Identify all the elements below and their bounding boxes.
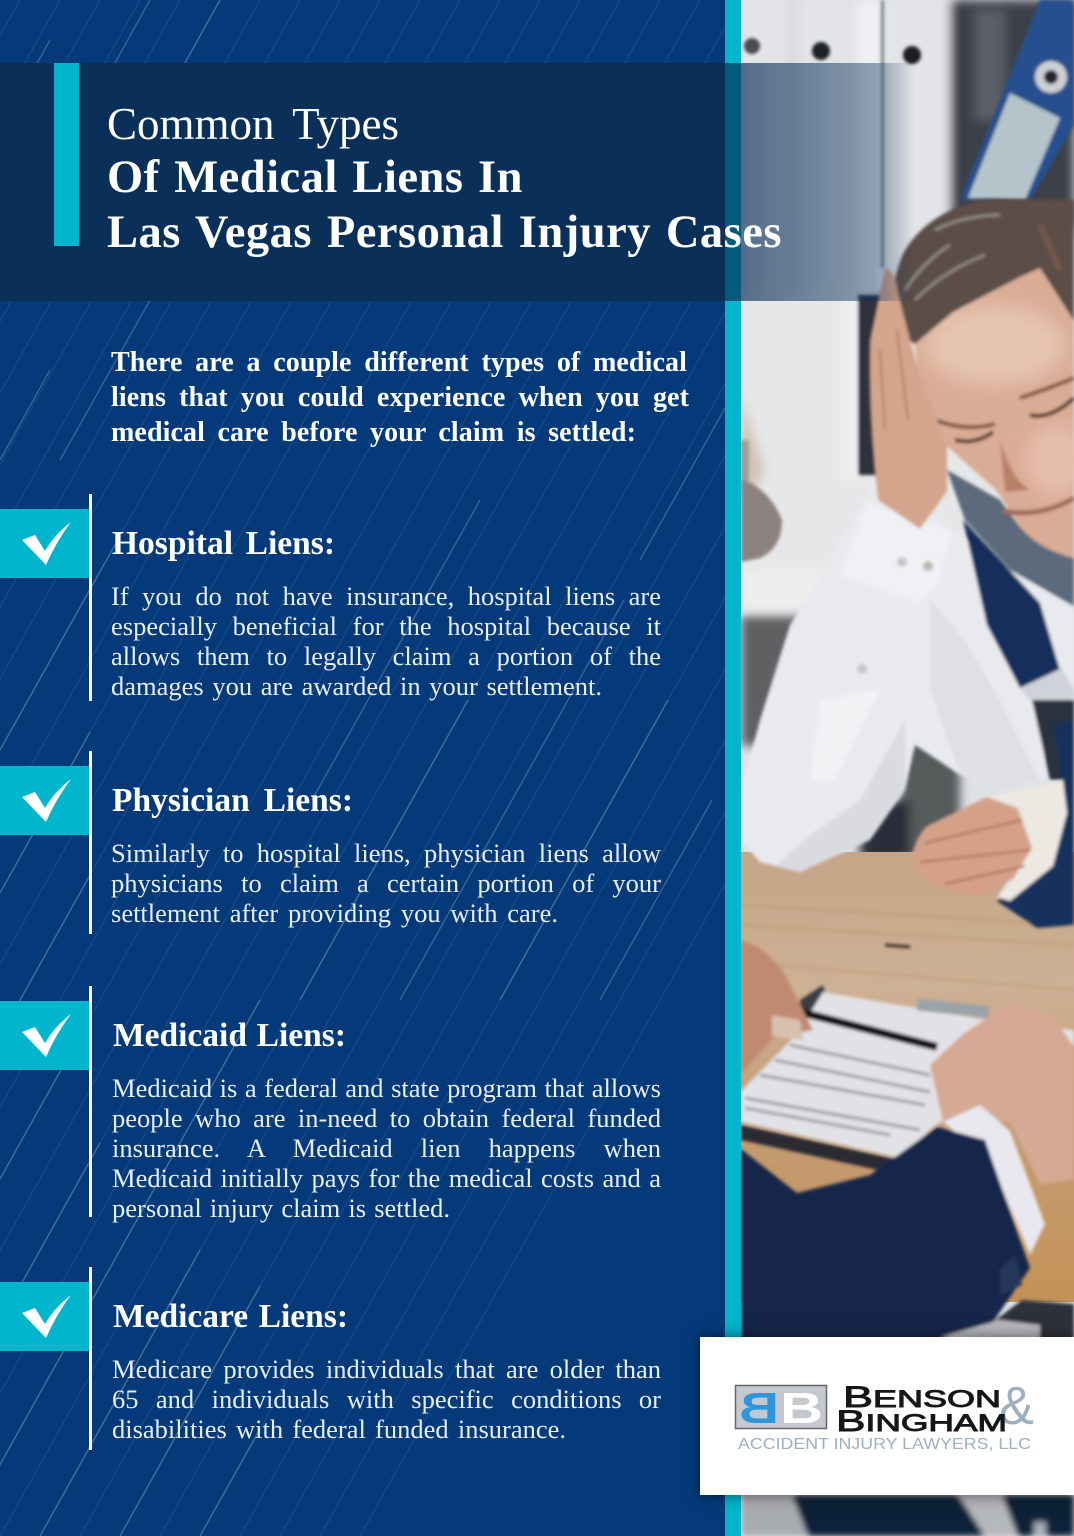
title: Common Types — [107, 99, 399, 149]
text: hospital liens body: If you do not have insurance, hospital liens are — [111, 581, 661, 611]
heading: medicaid liens: Medicaid Liens: — [113, 1017, 346, 1054]
logo: Benson & Bingham: & — [999, 1376, 1034, 1436]
text: medicare liens body: Medicare provides individuals that are older than — [112, 1354, 661, 1384]
intro text: medical care before your claim is settled: — [111, 417, 636, 448]
logo: Benson & Bingham — [734, 1376, 1034, 1453]
panel: physician liens — [0, 751, 661, 934]
logo: Benson & Bingham: B — [780, 1384, 823, 1433]
hand on table — [912, 797, 1032, 897]
title accent bar — [54, 63, 79, 246]
intro text: There are a couple different types of medical — [111, 347, 687, 378]
scarf / neck brace — [947, 470, 1074, 606]
background with diagonal stripes — [0, 0, 725, 1536]
table edge — [993, 1300, 1074, 1340]
panel: medicaid liens — [0, 986, 661, 1223]
text: medicare liens body — [112, 1354, 661, 1444]
text: medicaid liens body — [112, 1073, 661, 1223]
text: medicaid liens body: people who are in-need to obtain federal funded — [112, 1103, 661, 1133]
text: hospital liens body — [111, 581, 661, 701]
text: physician liens body: Similarly to hospital liens, physician liens allow — [111, 838, 661, 868]
lawyer right hand — [930, 1003, 1074, 1184]
navy suit — [741, 1127, 1030, 1348]
text: hospital liens body: damages you are awarded in your settlement. — [111, 671, 602, 701]
text: physician liens body: physicians to claim a certain portion of your — [111, 868, 661, 898]
logo: Benson & Bingham: ACCIDENT INJURY LAWYERS, LLC — [738, 1436, 1031, 1453]
face — [915, 268, 1074, 558]
pen — [800, 1012, 937, 1047]
intro text: liens that you could experience when you get — [111, 382, 689, 413]
text: physician liens body: settlement after providing you with care. — [111, 898, 558, 928]
panel: medicare liens — [0, 1267, 661, 1450]
brows eyes mouth — [935, 420, 995, 427]
shirt — [741, 470, 1074, 872]
clipboard — [800, 985, 830, 1025]
lawyer left hand — [741, 941, 813, 1074]
text: medicaid liens body: Medicaid initially pays for the medical costs and a — [112, 1163, 661, 1193]
logo: Benson & Bingham: B INGHAM — [836, 1405, 1007, 1438]
icon: check box — [0, 766, 89, 835]
teal vertical stripe — [725, 0, 741, 1536]
heading: hospital liens: Hospital Liens: — [112, 525, 335, 562]
hair — [888, 199, 1074, 344]
title: Las Vegas Personal Injury Cases — [107, 206, 782, 258]
text: medicare liens body: 65 and individuals with specific conditions or — [112, 1384, 661, 1414]
white cuff — [943, 1105, 1045, 1255]
title — [107, 99, 782, 258]
logo: Benson & Bingham: B — [739, 1384, 779, 1433]
logo: Benson & Bingham: B ENSON — [843, 1381, 1001, 1414]
cast — [987, 780, 1067, 901]
title: Of Medical Liens In — [107, 152, 523, 202]
raised hand — [870, 268, 947, 529]
text: hospital liens body: allows them to legally claim a portion of the — [111, 641, 661, 671]
text: medicaid liens body: insurance. A Medicaid lien happens when — [112, 1133, 661, 1163]
heading: physician liens: Physician Liens: — [112, 782, 353, 819]
icon: check box — [0, 1282, 89, 1351]
text: medicaid liens body: Medicaid is a federal and state program that allows — [112, 1073, 661, 1103]
heading: medicare liens: Medicare Liens: — [113, 1298, 348, 1335]
photo: stressed man with neck brace and lawyer at desk — [741, 0, 1074, 1536]
text: physician liens body — [111, 838, 661, 928]
title band — [0, 63, 910, 301]
icon: check box — [0, 509, 89, 578]
text: medicaid liens body: personal injury claim is settled. — [112, 1193, 450, 1223]
logo panel — [700, 1337, 1074, 1495]
text: medicare liens body: disabilities with federal funded insurance. — [112, 1414, 566, 1444]
text: hospital liens body: especially beneficial for the hospital because it — [111, 611, 661, 641]
lower strip under logo — [741, 1490, 1074, 1536]
sleeve with navy — [997, 720, 1074, 928]
table — [741, 852, 1074, 1302]
icon: check box — [0, 1001, 89, 1070]
intro text — [111, 347, 689, 448]
panel: hospital liens — [0, 494, 661, 701]
suspender — [963, 520, 1060, 688]
